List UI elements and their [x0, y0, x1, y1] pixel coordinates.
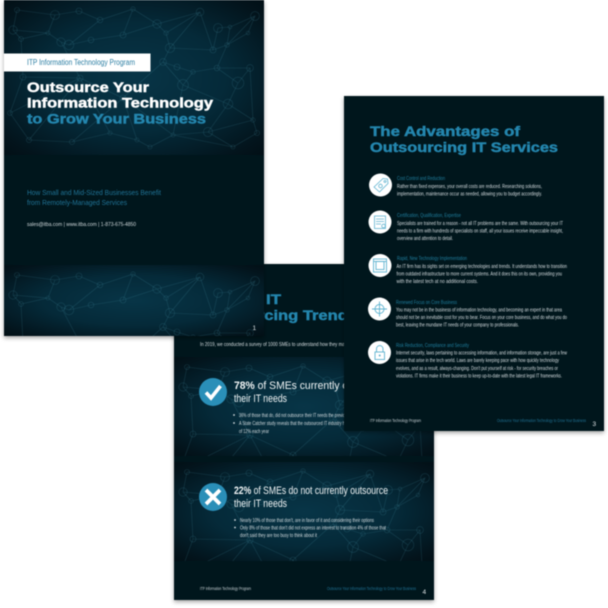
cover top network band — [4, 0, 264, 155]
page 3 footer — [370, 418, 596, 428]
item: rapid implementation — [368, 254, 567, 285]
text: cost control — [397, 176, 542, 198]
item: risk reduction — [368, 341, 567, 380]
cover bottom network band — [4, 265, 264, 414]
icon: certificate — [368, 210, 392, 234]
icon: crosshair — [368, 298, 391, 320]
page 3 footer: ITP Information Technology Program — [370, 418, 421, 423]
page 1: cover — [4, 0, 264, 414]
78 percent bullets: of 12% each year — [239, 429, 269, 435]
78 percent bullets: A State Catcher study reveals that the outsourced IT industry has an annual growth — [239, 421, 379, 427]
text: risk reduction: issues that arise in the tech world. Laws are barely keeping pace with how quickly technology — [396, 358, 559, 364]
cover page number: 1 — [252, 325, 256, 332]
text: rapid implementation: Rapid, New Technology Implementation — [397, 256, 467, 262]
78 percent headline — [234, 380, 388, 405]
icon: cross mark — [199, 483, 227, 511]
page 4 footer: 4 — [422, 589, 426, 596]
panel: 78 percent outsource — [174, 357, 434, 506]
page 4 heading: Outsourcing Trends — [200, 308, 357, 323]
text: risk reduction: Risk Reduction, Compliance and Security — [396, 343, 469, 349]
text: risk reduction: evolves, and as a result, always-changing. Don't put yourself at risk - for security breaches or — [396, 366, 558, 372]
cover subtitle: How Small and Mid-Sized Businesses Benefit — [27, 188, 161, 197]
page 3 title — [370, 124, 558, 155]
icon: check mark — [199, 378, 227, 406]
text: core business focus — [396, 300, 567, 328]
cover title: Information Technology — [27, 96, 214, 111]
cover subtitle — [27, 188, 161, 207]
text: certification: Certification, Qualification, Expertise — [397, 213, 461, 219]
icon: screen — [368, 254, 392, 277]
22 percent bullets: Only 8% of those that don't did not express an interest to transition 4% of those that — [240, 526, 386, 532]
text: risk reduction — [396, 343, 567, 380]
text: certification — [397, 213, 564, 242]
item: cost control — [369, 174, 542, 198]
cover title — [27, 80, 214, 126]
78 percent bullets: 36% of those that do, did not outsource their IT needs the previous year — [239, 413, 357, 419]
text: cost control: Cost Control and Reduction — [397, 176, 445, 182]
page 3 title: The Advantages of — [370, 124, 521, 139]
cover program label — [4, 54, 150, 72]
22 percent headline: their IT needs — [234, 498, 287, 510]
22 percent bullets: Nearly 10% of those that don't, are in favor of it and considering their options — [240, 518, 374, 524]
page 3: advantages — [344, 96, 604, 431]
cover title: to Grow Your Business — [27, 111, 206, 126]
page 4 heading — [200, 292, 357, 323]
text: certification: overview and attention to detail. — [397, 236, 453, 242]
page 4 footer — [200, 586, 426, 596]
text: rapid implementation: with the latest tech at no additional costs. — [396, 279, 478, 285]
page 4 heading: IT — [266, 292, 282, 307]
icon: padlock — [368, 341, 391, 364]
22 percent headline: 22% of SMEs do not currently outsource — [234, 485, 388, 497]
text: cost control: implementation, maintenance occur as needed, allowing you to budget accordingly. — [397, 192, 542, 198]
page 4 footer: ITP Information Technology Program — [200, 586, 251, 591]
text: rapid implementation — [396, 256, 567, 285]
78 percent headline: their IT needs — [234, 393, 287, 405]
cover contact line: sales@itba.com | www.itba.com | 1-873-675-4850 — [27, 222, 136, 228]
page 3 title: Outsourcing IT Services — [370, 140, 558, 155]
panel: 22 percent do not outsource — [174, 462, 434, 608]
22 percent bullets: don't said they are too busy to think about it — [240, 533, 317, 539]
page 4: SME outsourcing trends — [174, 264, 434, 608]
text: core business focus: best, leaving the mundane IT needs of your company to professionals. — [396, 322, 519, 328]
item: certification — [368, 210, 564, 242]
22 percent headline — [234, 485, 388, 510]
text: core business focus: Renewed Focus on Core Business — [396, 300, 457, 306]
78 percent bullets — [233, 413, 379, 435]
text: cost control: Rather than fixed expenses, your overall costs are reduced. Researching solutions, — [397, 184, 542, 190]
page 4 intro sentence: In 2019, we conducted a survey of 1000 SMEs to understand how they manage their IT. — [200, 342, 370, 348]
page 3 footer: 3 — [592, 421, 596, 428]
cover title: Outsource Your — [27, 80, 150, 95]
cover program label: ITP Information Technology Program — [27, 58, 135, 67]
icon: price tag — [369, 174, 392, 196]
page 4 footer: Outsource Your Information Technology to Grow Your Business — [327, 586, 416, 591]
item: core business focus — [368, 298, 567, 328]
22 percent bullets — [234, 518, 386, 539]
78 percent headline: 78% of SMEs currently outsource — [234, 380, 388, 392]
cover subtitle: from Remotely-Managed Services — [27, 198, 127, 207]
